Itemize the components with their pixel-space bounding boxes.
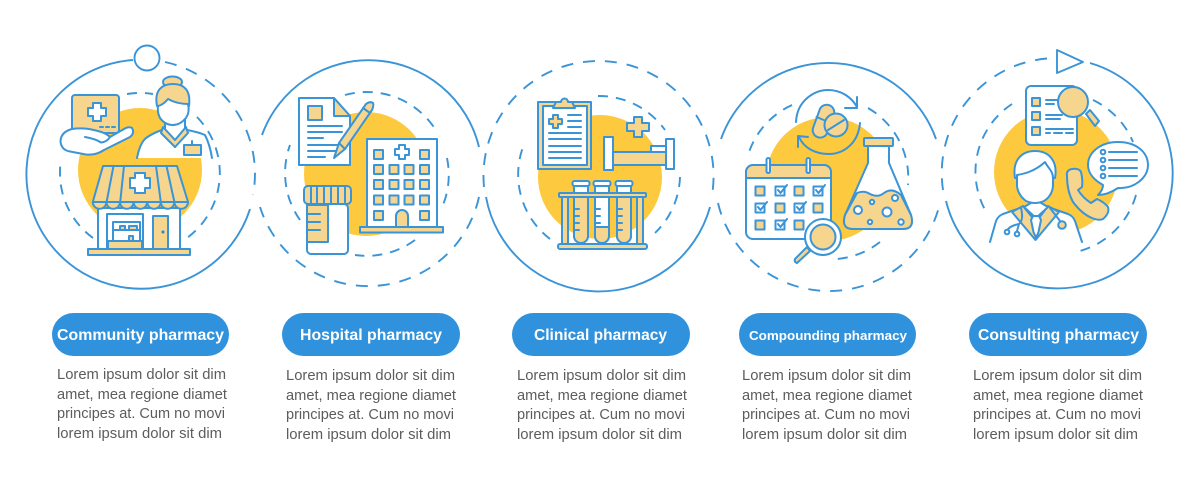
label: clinical pharmacy [512, 313, 690, 356]
ring: clinical outer [483, 61, 714, 291]
text block: hospital: lorem ipsum dolor sit dim [286, 426, 451, 443]
text block: hospital: principes at. Cum no movi [286, 406, 454, 423]
ring: hospital inner [285, 92, 449, 256]
ring: hospital outer [260, 60, 479, 286]
text block: clinical [517, 367, 688, 443]
icon: calendar [746, 158, 831, 239]
panel: consulting pharmacy [942, 50, 1173, 288]
text block: clinical: Lorem ipsum dolor sit dim [517, 367, 686, 384]
icon: test tube rack [558, 181, 647, 249]
label: community pharmacy [52, 313, 229, 356]
text block: community: principes at. Cum no movi [57, 405, 225, 422]
icon: doctor [990, 151, 1082, 242]
ring: clinical inner [518, 96, 680, 239]
icon: medicine bottle [304, 186, 351, 254]
ring: community inner [60, 93, 220, 238]
ring: compounding outer [718, 63, 940, 291]
panel: community pharmacy [26, 46, 255, 289]
text block: compounding: amet, mea regione diamet [742, 387, 913, 404]
text block: compounding: Lorem ipsum dolor sit dim [742, 367, 911, 384]
text block: community [57, 366, 228, 442]
text block: consulting: amet, mea regione diamet [973, 387, 1144, 404]
icon: hospital bed [604, 137, 674, 170]
yellow disc [994, 110, 1118, 234]
ring: compounding inner [749, 105, 908, 259]
ring: community outer [26, 60, 255, 289]
label: community pharmacy: Community pharmacy [57, 327, 224, 344]
label: compounding pharmacy [739, 313, 916, 356]
label: compounding pharmacy: Compounding pharmacy [749, 328, 908, 343]
text block: community: Lorem ipsum dolor sit dim [57, 366, 226, 383]
text block: compounding: lorem ipsum dolor sit dim [742, 426, 907, 443]
icon: magnifier [795, 219, 841, 263]
icon: floating cross [627, 117, 649, 137]
panel: clinical pharmacy [483, 61, 714, 291]
icon: telephone [1067, 169, 1108, 220]
icon: pharmacy store [88, 166, 190, 255]
marker: start circle [134, 46, 160, 70]
panel: hospital pharmacy [260, 60, 479, 286]
text block: clinical: amet, mea regione diamet [517, 387, 688, 404]
icon: checklist and magnifier [1026, 86, 1099, 145]
arrows: cycle [796, 90, 860, 154]
ring: consulting inner [975, 100, 1136, 252]
icon: flask [844, 138, 912, 229]
yellow disc [766, 117, 890, 241]
text block: community: amet, mea regione diamet [57, 386, 228, 403]
yellow disc [304, 112, 428, 236]
text block: compounding: principes at. Cum no movi [742, 406, 910, 423]
text block: community: lorem ipsum dolor sit dim [57, 425, 222, 442]
icon: speech bubble [1088, 142, 1148, 195]
label: clinical pharmacy: Clinical pharmacy [534, 327, 667, 344]
icon: prescription card on hand [60, 95, 133, 155]
text block: consulting [973, 367, 1144, 443]
icon: document and pencil [299, 98, 373, 165]
text block: consulting: lorem ipsum dolor sit dim [973, 426, 1138, 443]
label: consulting pharmacy: Consulting pharmacy [978, 327, 1139, 344]
icon: hospital building [360, 139, 443, 232]
yellow disc [538, 115, 662, 239]
text block: hospital [286, 367, 457, 443]
ring: consulting outer [942, 58, 1173, 288]
marker: end triangle [1057, 50, 1083, 73]
panel: compounding pharmacy [718, 63, 940, 291]
text block: hospital: Lorem ipsum dolor sit dim [286, 367, 455, 384]
icon: pharmacist [137, 76, 212, 158]
label: consulting pharmacy [969, 313, 1147, 356]
icon: clipboard [538, 99, 591, 169]
text block: clinical: lorem ipsum dolor sit dim [517, 426, 682, 443]
yellow disc [78, 108, 202, 232]
text block: compounding [742, 367, 913, 443]
text block: hospital: amet, mea regione diamet [286, 387, 457, 404]
text block: consulting: Lorem ipsum dolor sit dim [973, 367, 1142, 384]
label: hospital pharmacy: Hospital pharmacy [300, 327, 442, 344]
text block: consulting: principes at. Cum no movi [973, 406, 1141, 423]
icon: pills [811, 103, 848, 140]
text block: clinical: principes at. Cum no movi [517, 406, 685, 423]
label: hospital pharmacy [282, 313, 460, 356]
